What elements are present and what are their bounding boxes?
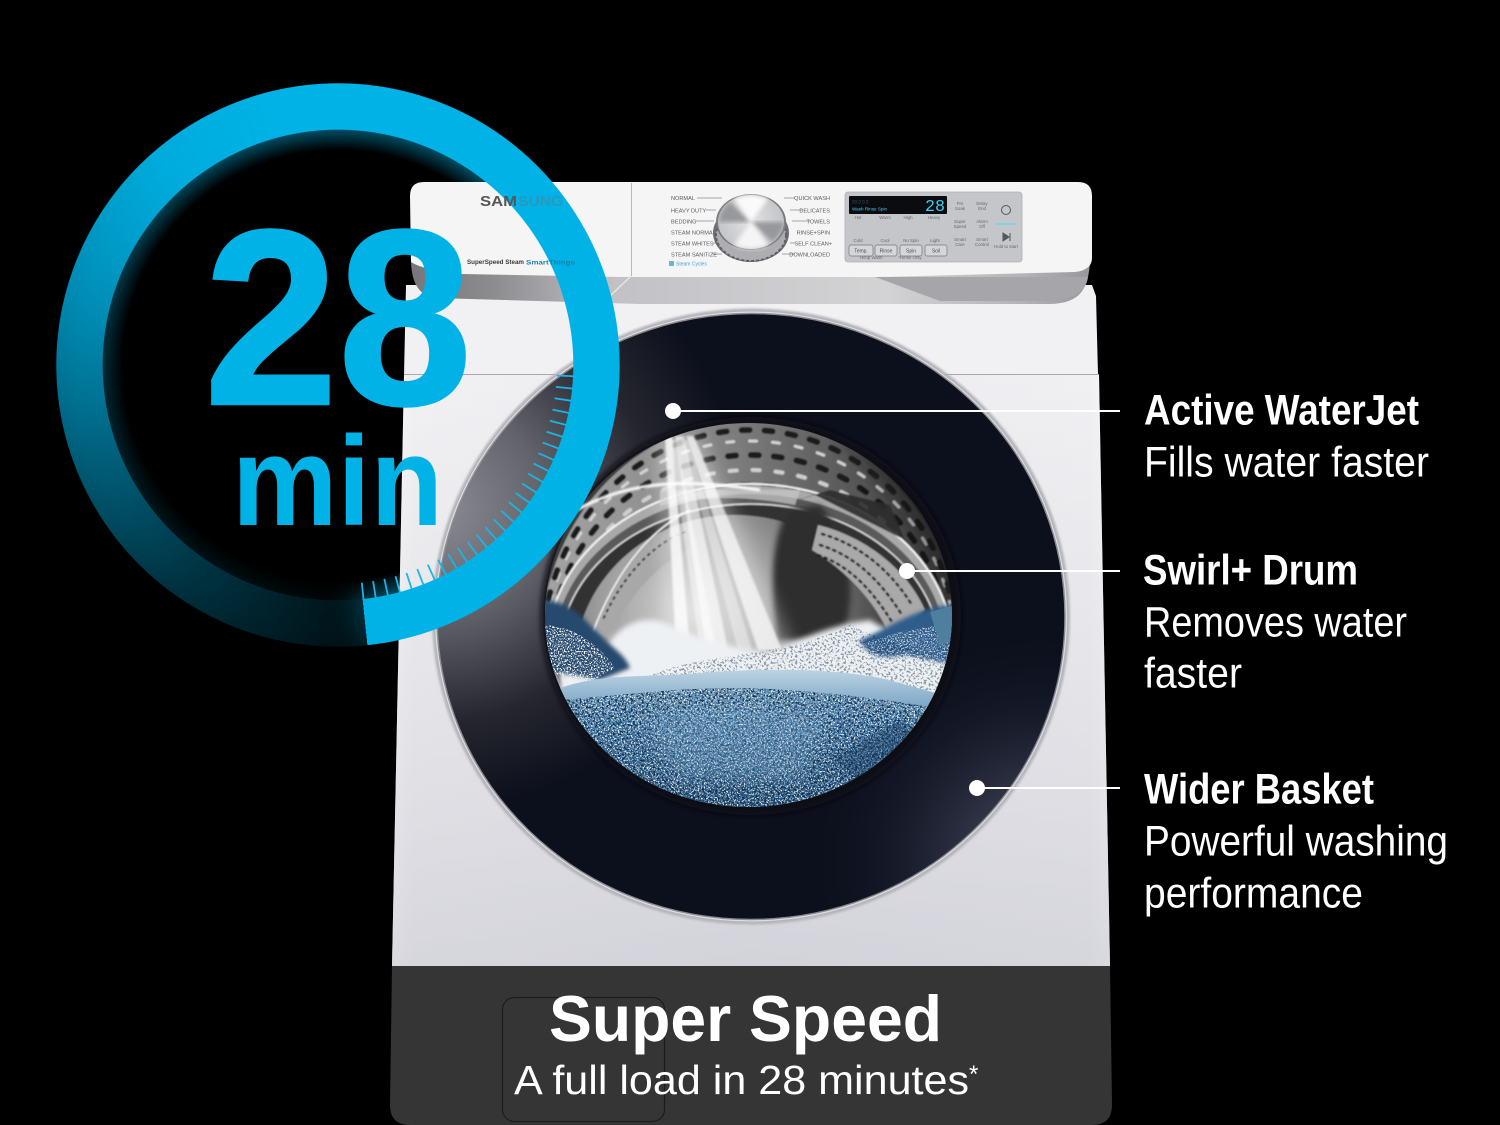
- control panel top: [410, 182, 1092, 277]
- control display panel: *Rinse Only: [898, 255, 922, 260]
- cycle labels left: [669, 196, 810, 268]
- footnote asterisk: *: [969, 1061, 978, 1088]
- timer ring glow: [56, 83, 552, 646]
- dial: [713, 194, 789, 262]
- control display panel: Alarm: [976, 219, 988, 224]
- model name: SuperSpeed Steam: [467, 260, 524, 266]
- jeans left: [540, 600, 630, 680]
- cycle labels right: DOWNLOADED: [789, 252, 830, 258]
- control display panel: Cool: [880, 238, 890, 243]
- cycle labels right: DELICATES: [799, 208, 830, 214]
- callout: wider basket: [969, 766, 1448, 918]
- callout: swirl+ drum: Removes water: [1144, 598, 1407, 646]
- control display panel: Rinse: [880, 248, 893, 254]
- cabinet lower front: [392, 375, 1110, 966]
- model name: [467, 260, 576, 266]
- washing machine: [392, 182, 1110, 966]
- water body: [566, 688, 928, 807]
- jeans right: [860, 605, 955, 665]
- brand logo: SUNG: [518, 193, 563, 210]
- control display panel: Soil: [932, 248, 940, 254]
- control display panel: Light: [930, 238, 941, 243]
- cabinet upper front: [404, 285, 1098, 375]
- control display panel: Delay: [976, 201, 988, 206]
- control display panel: Wash Rinse Spin: [852, 206, 888, 212]
- door outer rim: [432, 308, 1070, 924]
- control display panel: Heavy: [928, 215, 941, 220]
- control display panel: Speed: [954, 224, 967, 229]
- control display panel: Control: [975, 242, 989, 247]
- brand logo: [480, 193, 563, 210]
- control display panel: High: [903, 215, 913, 220]
- cycle labels right: TOWELS: [806, 220, 830, 226]
- timer tick marks: [362, 373, 565, 591]
- callout: active waterjet: [665, 386, 1429, 486]
- control display panel: Smart: [954, 237, 967, 242]
- cycle labels left: HEAVY DUTY: [671, 208, 706, 214]
- foam spray: [649, 625, 945, 690]
- model name: SmartThings: [526, 260, 576, 266]
- control display panel: [845, 192, 1022, 262]
- cycle labels left: STEAM WHITES: [671, 242, 714, 248]
- control display panel: Temp Wash: [859, 255, 883, 260]
- control display panel: No Spin: [903, 238, 919, 243]
- unit min: min: [232, 410, 443, 552]
- water jet rays: [560, 436, 800, 660]
- control display panel: Off: [979, 224, 986, 229]
- foam: [560, 620, 950, 710]
- drawer recess: [411, 262, 1090, 304]
- base reflection panel: [390, 966, 1112, 1125]
- control display panel: Hot: [855, 215, 862, 220]
- control display panel: Spin: [906, 248, 916, 254]
- heading: super speed: Super Speed: [549, 982, 942, 1055]
- cycle labels right: QUICK WASH: [794, 196, 830, 202]
- control display panel: Hold to start: [994, 244, 1019, 249]
- control display panel: Super: [954, 219, 966, 224]
- callout: swirl+ drum: Swirl+ Drum: [1143, 546, 1358, 594]
- display digits: 28: [925, 198, 945, 217]
- control display panel: End: [978, 206, 986, 211]
- control display panel: ▯▯ ▯ ▯ ▯: [852, 199, 869, 204]
- cycle labels right: SELF CLEAN+: [795, 242, 832, 248]
- control display panel: Warm: [879, 215, 891, 220]
- big number 28: 28: [204, 178, 472, 457]
- cycle labels left: NORMAL: [671, 196, 695, 202]
- control display panel: Soak: [955, 206, 966, 211]
- timer ring: [56, 83, 620, 647]
- drum window: [545, 423, 952, 807]
- callout: swirl+ drum: [899, 546, 1407, 698]
- cycle labels left: BEDDING: [671, 220, 696, 226]
- callout: wider basket: Powerful washing: [1144, 818, 1448, 866]
- callout: active waterjet: Fills water faster: [1144, 438, 1429, 486]
- callout: active waterjet: Active WaterJet: [1144, 386, 1419, 434]
- door dark ring: [437, 314, 1065, 920]
- cycle labels left: STEAM NORMAL: [671, 230, 716, 236]
- water surface: [555, 670, 950, 715]
- cycle labels left: Steam Cycles: [676, 262, 707, 268]
- control display panel: Pre: [957, 201, 964, 206]
- callout: wider basket: Wider Basket: [1144, 766, 1374, 814]
- callout: swirl+ drum: faster: [1144, 650, 1242, 698]
- control display panel: Temp.: [854, 248, 868, 254]
- callout: wider basket: performance: [1144, 870, 1363, 918]
- cycle labels right: RINSE+SPIN: [797, 230, 830, 236]
- cycle labels right: [789, 196, 832, 258]
- drum interior: [545, 423, 952, 807]
- subheading: A full load in 28 minutes: [514, 1057, 969, 1103]
- control display panel: Cold: [853, 238, 863, 243]
- cycle labels left: STEAM SANITIZE: [671, 252, 717, 258]
- brand logo: SAM: [480, 193, 517, 210]
- control display panel: Care: [955, 242, 965, 247]
- control display panel: Smart: [976, 237, 989, 242]
